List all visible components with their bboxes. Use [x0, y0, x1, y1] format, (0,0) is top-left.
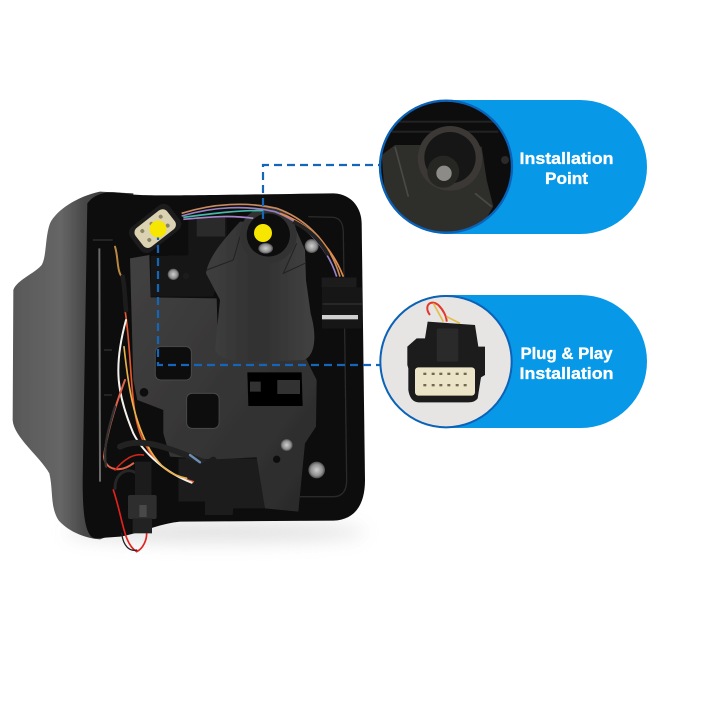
mounting boss [206, 207, 314, 362]
pill background [380, 295, 647, 428]
back plate [130, 255, 317, 512]
outer grey shell [13, 192, 133, 539]
left wire bundle [104, 247, 213, 552]
bottom tab [178, 458, 265, 515]
top wire harness [182, 204, 343, 277]
ground shadow [65, 522, 365, 542]
marker: mount dot [254, 224, 272, 242]
marker: connector dot [150, 220, 166, 238]
screws [140, 239, 325, 478]
product: tail light rear view [13, 192, 365, 552]
plate openings [155, 347, 191, 380]
label: Plug & Play [520, 344, 613, 363]
label: Installation [520, 149, 614, 168]
callout: installation point: Point [545, 169, 588, 188]
upper rib [151, 216, 227, 297]
right connector [322, 277, 362, 329]
callout: installation point [378, 100, 647, 237]
black housing [83, 192, 365, 538]
detail photo: connector [378, 293, 515, 430]
dashed leader: installation point [263, 165, 381, 232]
callout: plug and play: Installation [520, 364, 614, 383]
pill background [380, 100, 647, 234]
dashed leader: plug and play [158, 232, 381, 365]
bottom plug connector [128, 462, 157, 533]
housing inner rim [300, 217, 347, 497]
top-left plug connector [126, 201, 185, 256]
detail photo: mounting boss [378, 100, 515, 237]
callout: plug and play [378, 293, 647, 430]
